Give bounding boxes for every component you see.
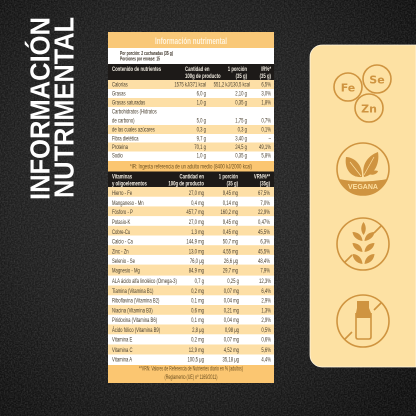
table rows: vitamins and minerals: 12,9 mg xyxy=(189,347,204,354)
table rows: vitamins and minerals: 0,14 mg xyxy=(223,200,238,207)
table header: nutrients: (35 g) xyxy=(260,73,271,80)
table rows: vitamins and minerals: 0,25 g xyxy=(227,278,239,285)
table rows: vitamins and minerals: 0,5% xyxy=(261,327,271,334)
table rows: vitamins and minerals: 5,6% xyxy=(261,347,271,354)
table rows: vitamins and minerals: 0,45 mg xyxy=(223,229,238,236)
table header: nutrients xyxy=(108,64,274,80)
table rows: nutrients: 1,0 g xyxy=(197,153,206,160)
footnote: reference intake xyxy=(108,161,274,172)
table rows: vitamins and minerals: Ácido fólico (Vitamina B9) xyxy=(112,326,160,334)
table rows: vitamins and minerals: 0,7 g xyxy=(195,278,204,285)
table rows: vitamins and minerals: 144,9 mg xyxy=(186,239,204,246)
table rows: nutrients xyxy=(108,80,274,160)
table rows: vitamins and minerals: 0,2 mg xyxy=(191,288,204,295)
table rows: vitamins and minerals: 0,1 mg xyxy=(191,317,204,324)
table rows: nutrients: 1,0 g xyxy=(197,100,206,107)
title: rotated heading: NUTRIMENTAL xyxy=(48,17,80,198)
table rows: nutrients: 70,1 g xyxy=(194,144,206,151)
table rows: vitamins and minerals: 67,5% xyxy=(258,190,270,197)
table rows: vitamins and minerals: Vitamina E xyxy=(112,337,133,344)
table header: vitamins and minerals: 100g de producto xyxy=(168,181,204,188)
table rows: nutrients: Proteína xyxy=(112,144,129,151)
table rows: vitamins and minerals: 4,4% xyxy=(261,357,271,364)
table rows: vitamins and minerals: 7,0% xyxy=(260,200,270,207)
table rows: vitamins and minerals: Vitamina A xyxy=(112,357,132,364)
table rows: nutrients: 2,10 g xyxy=(235,91,247,98)
table rows: vitamins and minerals: 27,0 mg xyxy=(189,190,204,197)
table rows: nutrients: 1,8% xyxy=(261,100,271,107)
table rows: vitamins and minerals: Zinc - Zn xyxy=(112,249,129,256)
table rows: vitamins and minerals: Magnesio - Mg xyxy=(112,268,140,275)
table header: vitamins and minerals: Vitaminas xyxy=(112,174,132,181)
table rows: vitamins and minerals: Vitamina C xyxy=(112,347,133,354)
panel: product attributes xyxy=(310,45,416,367)
title: rotated heading: INFORMACIÓN xyxy=(24,17,56,200)
table rows: vitamins and minerals: 12,3% xyxy=(259,278,271,285)
table rows: nutrients: 49,1% xyxy=(259,144,271,151)
table rows: nutrients: 1,75 g xyxy=(235,118,247,125)
table rows: vitamins and minerals: 0,47% xyxy=(258,219,270,226)
table rows: vitamins and minerals: 50,7 mg xyxy=(223,239,238,246)
table rows: vitamins and minerals: 35,18 μg xyxy=(223,357,239,364)
table rows: vitamins and minerals: Selenio - Se xyxy=(112,258,135,265)
table header: vitamins and minerals: VRN%** xyxy=(254,174,271,181)
table rows: vitamins and minerals: Fósforo - P xyxy=(112,209,133,216)
icon: minerals Fe Se Zn: Fe xyxy=(341,82,355,94)
table rows: nutrients: 9,7 g xyxy=(197,136,206,143)
table rows: nutrients: 3,40 g xyxy=(235,136,247,143)
serving information xyxy=(120,51,173,62)
table rows: vitamins and minerals: 45,5% xyxy=(258,249,270,256)
table rows: nutrients: de las cuales azúcares xyxy=(112,127,155,134)
table rows: nutrients: 6,0 g xyxy=(197,91,206,98)
table rows: nutrients: 0,3 g xyxy=(238,127,247,134)
table rows: vitamins and minerals: 27,0 mg xyxy=(189,219,204,226)
serving information: Porciones por envase: 15 xyxy=(120,56,160,62)
table rows: vitamins and minerals: 26,6 μg xyxy=(224,258,238,265)
table header: nutrients: IR%* xyxy=(261,66,272,73)
table rows: vitamins and minerals: 0,04 mg xyxy=(224,317,239,324)
table rows: nutrients: 551,2 kJ/130,5 kcal xyxy=(214,82,250,89)
table header: vitamins and minerals: (35g) xyxy=(260,181,270,188)
table header: nutrients: (35 g) xyxy=(236,73,247,80)
table rows: vitamins and minerals: 45,5% xyxy=(258,229,270,236)
table rows: vitamins and minerals: Piridoxina (Vitamina B6) xyxy=(112,317,157,324)
table rows: vitamins and minerals: Potasio-K xyxy=(112,219,131,226)
table rows: vitamins and minerals: 100,5 μg xyxy=(187,357,204,364)
table rows: nutrients: 0,3 g xyxy=(197,127,206,134)
table rows: vitamins and minerals: 4,55 mg xyxy=(223,249,238,256)
table rows: vitamins and minerals: 0,07 mg xyxy=(224,337,239,344)
table rows: vitamins and minerals: Tiamina (Vitamina B1) xyxy=(112,288,154,295)
table rows: vitamins and minerals: 1,3% xyxy=(261,308,271,315)
table rows: vitamins and minerals: 4,52 mg xyxy=(224,347,239,354)
table header: nutrients: 100g de producto xyxy=(185,73,221,80)
table rows: vitamins and minerals: 0,07 mg xyxy=(224,288,239,295)
table rows: nutrients: Sodio xyxy=(112,153,123,160)
table rows: vitamins and minerals: 2,9% xyxy=(261,317,271,324)
table rows: nutrients: Grasas saturadas xyxy=(112,100,145,107)
table rows: vitamins and minerals: 0,04 mg xyxy=(224,298,239,305)
serving information: Por porción: 2 cucharadas (35 g) xyxy=(120,51,173,57)
table rows: vitamins and minerals: 0,21 mg xyxy=(224,308,239,315)
table rows: vitamins and minerals: 6,3% xyxy=(260,239,270,246)
table rows: vitamins and minerals: 6,4% xyxy=(261,288,271,295)
table rows: vitamins and minerals: 2,8 μg xyxy=(192,327,204,334)
table rows: vitamins and minerals: 9,45 mg xyxy=(223,219,238,226)
table rows: vitamins and minerals: 2,9% xyxy=(261,298,271,305)
table rows: nutrients: 24,5 g xyxy=(235,144,247,151)
table rows: vitamins and minerals: 84,9 mg xyxy=(189,268,204,275)
footnote: nutrient reference values: **VRN: Valores de Referencia de Nutrientes diario en % (adultos) xyxy=(139,366,243,372)
table header: vitamins and minerals: 1 porción xyxy=(219,174,238,181)
table rows: vitamins and minerals: Niacina (Vitamina B3) xyxy=(112,308,153,315)
table rows: nutrients: – xyxy=(269,136,272,143)
table rows: nutrients: Fibra dietética xyxy=(112,136,139,143)
table rows: vitamins and minerals: 48,4% xyxy=(258,258,270,265)
icon: minerals Fe Se Zn xyxy=(334,65,391,122)
table rows: nutrients: Grasas xyxy=(112,91,126,98)
icon: vegan badge: VEGANA xyxy=(348,182,378,191)
table rows: vitamins and minerals: 0,6 mg xyxy=(191,308,204,315)
table header: vitamins and minerals: Cantidad en xyxy=(179,174,204,181)
footnote: nutrient reference values: (Reglamento (UE) nº 1169/2011) xyxy=(164,374,218,381)
table rows: nutrients: 3,0% xyxy=(261,91,271,98)
table rows: nutrients: 0,35 g xyxy=(235,153,247,160)
table rows: nutrients: 6,5% xyxy=(261,82,271,89)
table rows: nutrients: 5,8% xyxy=(261,153,271,160)
heading: Información nutricional: Información nutrimental xyxy=(155,36,227,46)
title: rotated heading xyxy=(24,17,80,200)
table rows: vitamins and minerals: Cobre-Cu xyxy=(112,229,130,236)
table rows: vitamins and minerals: 0,2 mg xyxy=(191,337,204,344)
icon: gluten free wheat xyxy=(337,218,389,270)
table rows: vitamins and minerals: 22,9% xyxy=(258,209,270,216)
footnote: reference intake: *IR: Ingesta referencia de un adulto medio (8400 kJ/2000 kcal) xyxy=(130,164,252,170)
heading: Información nutricional xyxy=(108,32,274,48)
table rows: nutrients: 5,0 g xyxy=(197,118,206,125)
table rows: vitamins and minerals: 1,3 mg xyxy=(191,229,204,236)
table rows: vitamins and minerals: 76,0 μg xyxy=(190,258,204,265)
table rows: vitamins and minerals: 160,2 mg xyxy=(220,209,238,216)
table rows: nutrients: 0,1% xyxy=(261,127,271,134)
table rows: vitamins and minerals: 0,1 mg xyxy=(191,298,204,305)
table rows: vitamins and minerals: 9,45 mg xyxy=(223,190,238,197)
table rows: vitamins and minerals: 0,98 μg xyxy=(225,327,239,334)
table rows: vitamins and minerals xyxy=(108,187,274,364)
table header: nutrients: Cantidad en xyxy=(185,66,210,73)
table rows: vitamins and minerals: 13,0 mg xyxy=(189,249,204,256)
table header: nutrients: 1 porción xyxy=(228,66,247,73)
table rows: vitamins and minerals: 29,7 mg xyxy=(223,268,238,275)
footnote: nutrient reference values xyxy=(108,365,274,383)
table rows: vitamins and minerals: Manganeso - Mn xyxy=(112,200,144,207)
icon: minerals Fe Se Zn: Zn xyxy=(361,102,377,116)
table rows: nutrients: 0,7% xyxy=(261,118,271,125)
table rows: vitamins and minerals: 457,7 mg xyxy=(186,209,204,216)
table header: vitamins and minerals xyxy=(108,172,274,188)
table rows: nutrients: 0,35 g xyxy=(235,100,247,107)
panel: nutrition table xyxy=(108,32,274,383)
table rows: vitamins and minerals: Riboflavina (Vitamina B2) xyxy=(112,298,160,305)
table rows: vitamins and minerals: ALA ácido alfa linoléico (Omega-3) xyxy=(112,278,177,285)
table rows: vitamins and minerals: 0,4 mg xyxy=(191,200,204,207)
table rows: vitamins and minerals: 0,6% xyxy=(261,337,271,344)
table rows: nutrients: 1575 kJ/371 kcal xyxy=(174,82,206,89)
table header: nutrients: Contenido de nutrientes xyxy=(112,66,161,73)
table rows: vitamins and minerals: Hierro - Fe xyxy=(112,190,132,197)
table header: vitamins and minerals: y oligoelementos xyxy=(112,181,147,188)
table rows: nutrients: Calorías xyxy=(112,82,128,89)
icon: vegan badge xyxy=(337,143,389,195)
table header: vitamins and minerals: (35 g) xyxy=(227,181,238,188)
table rows: nutrients: de carbono) xyxy=(112,118,135,125)
icon: minerals Fe Se Zn: Se xyxy=(369,74,385,86)
table rows: nutrients: Carbohidratos (Hidratos xyxy=(112,109,157,116)
table rows: vitamins and minerals: Calcio - Ca xyxy=(112,239,134,246)
table rows: vitamins and minerals: 7,9% xyxy=(260,268,270,275)
icon: lactose free milk bottle xyxy=(337,295,389,347)
